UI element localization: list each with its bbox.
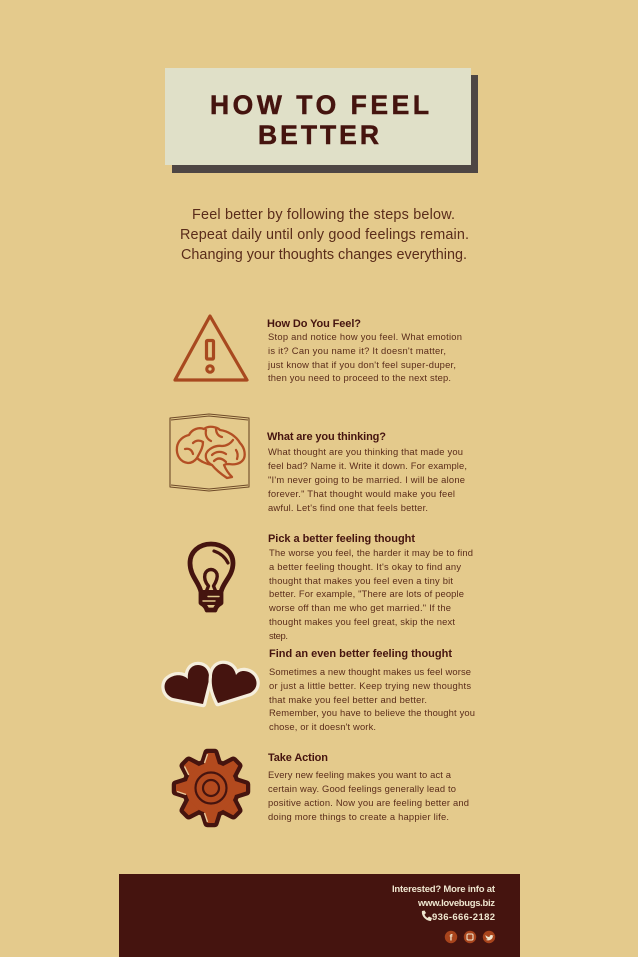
social icons: f [450,932,454,942]
step 1 text: Stop and notice how you feel. What emotion [268,331,462,342]
step 4 text: Find an even better feeling thought [269,648,452,660]
icon: phone [422,910,432,921]
contact text: 936-666-2182 [432,912,495,923]
step 5 text: Every new feeling makes you want to act a [268,769,452,780]
icon: two hearts [165,664,257,704]
step 3 text: step. [269,630,288,641]
icon: gear [176,753,246,823]
step 5 text: positive action. Now you are feeling better and [268,797,469,808]
step 4 text: or just a little better. Keep trying new thoughts [269,680,471,691]
title: BETTER [258,120,379,150]
title: HOW TO FEEL [210,90,429,120]
step 2 text: feel bad? Name it. Write it down. For example, [268,460,467,471]
step 2 text: What thought are you thinking that made you [268,446,463,457]
icon: light bulb [190,544,233,610]
icon: warning triangle [175,316,247,380]
social icons [445,931,495,943]
step 3 text: The worse you feel, the harder it may be to find [269,547,473,558]
intro text: Feel better by following the steps below. [192,207,455,223]
step 5 text: certain way. Good feelings generally lead to [268,783,456,794]
step 3 text: thought makes you feel great, skip the next [269,616,455,627]
step 4 text: Remember, you have to believe the thought you [269,707,475,718]
step 5 text: Take Action [268,752,328,764]
step 3 text: thought that makes you feel even a tiny bit [269,575,453,586]
intro text [180,207,469,263]
contact text: www.lovebugs.biz [417,898,495,909]
step 5 text: doing more things to create a happier life. [268,811,449,822]
step 1 text: then you need to proceed to the next step. [268,372,451,383]
contact text: Interested? More info at [392,884,496,895]
step 2 text: What are you thinking? [267,431,386,443]
step 3 text: better. For example, "There are lots of people [269,588,464,599]
step 1 text: How Do You Feel? [267,318,361,330]
step 4 text: that make you feel better and better. [269,694,427,705]
icon: brain in frame [170,414,249,491]
step 2 text [267,431,467,513]
step 2 text: awful. Let's find one that feels better. [268,502,428,513]
title [210,90,429,150]
step 4 text: Sometimes a new thought makes us feel worse [269,666,471,677]
step 1 text: just know that if you don't feel super-duper, [267,359,456,370]
step 3 text [268,533,473,641]
step 2 text: forever." That thought would make you feel [268,488,455,499]
step 2 text: "I'm never going to be married. I will be alone [268,474,465,485]
intro text: Repeat daily until only good feelings remain. [180,227,469,243]
title banner [165,68,478,173]
step 5 text [268,752,469,822]
step 3 text: a better feeling thought. It's okay to find any [269,561,461,572]
step 1 text: is it? Can you name it? It doesn't matter, [268,345,446,356]
step 3 text: worse off than me who get married." If the [268,602,451,613]
footer panel [119,874,520,957]
contact text [392,884,496,923]
step 3 text: Pick a better feeling thought [268,533,415,545]
step 4 text: chose, or it doesn't work. [269,721,376,732]
step 1 text [267,318,462,383]
step 4 text [269,648,475,732]
intro text: Changing your thoughts changes everything. [181,247,467,263]
